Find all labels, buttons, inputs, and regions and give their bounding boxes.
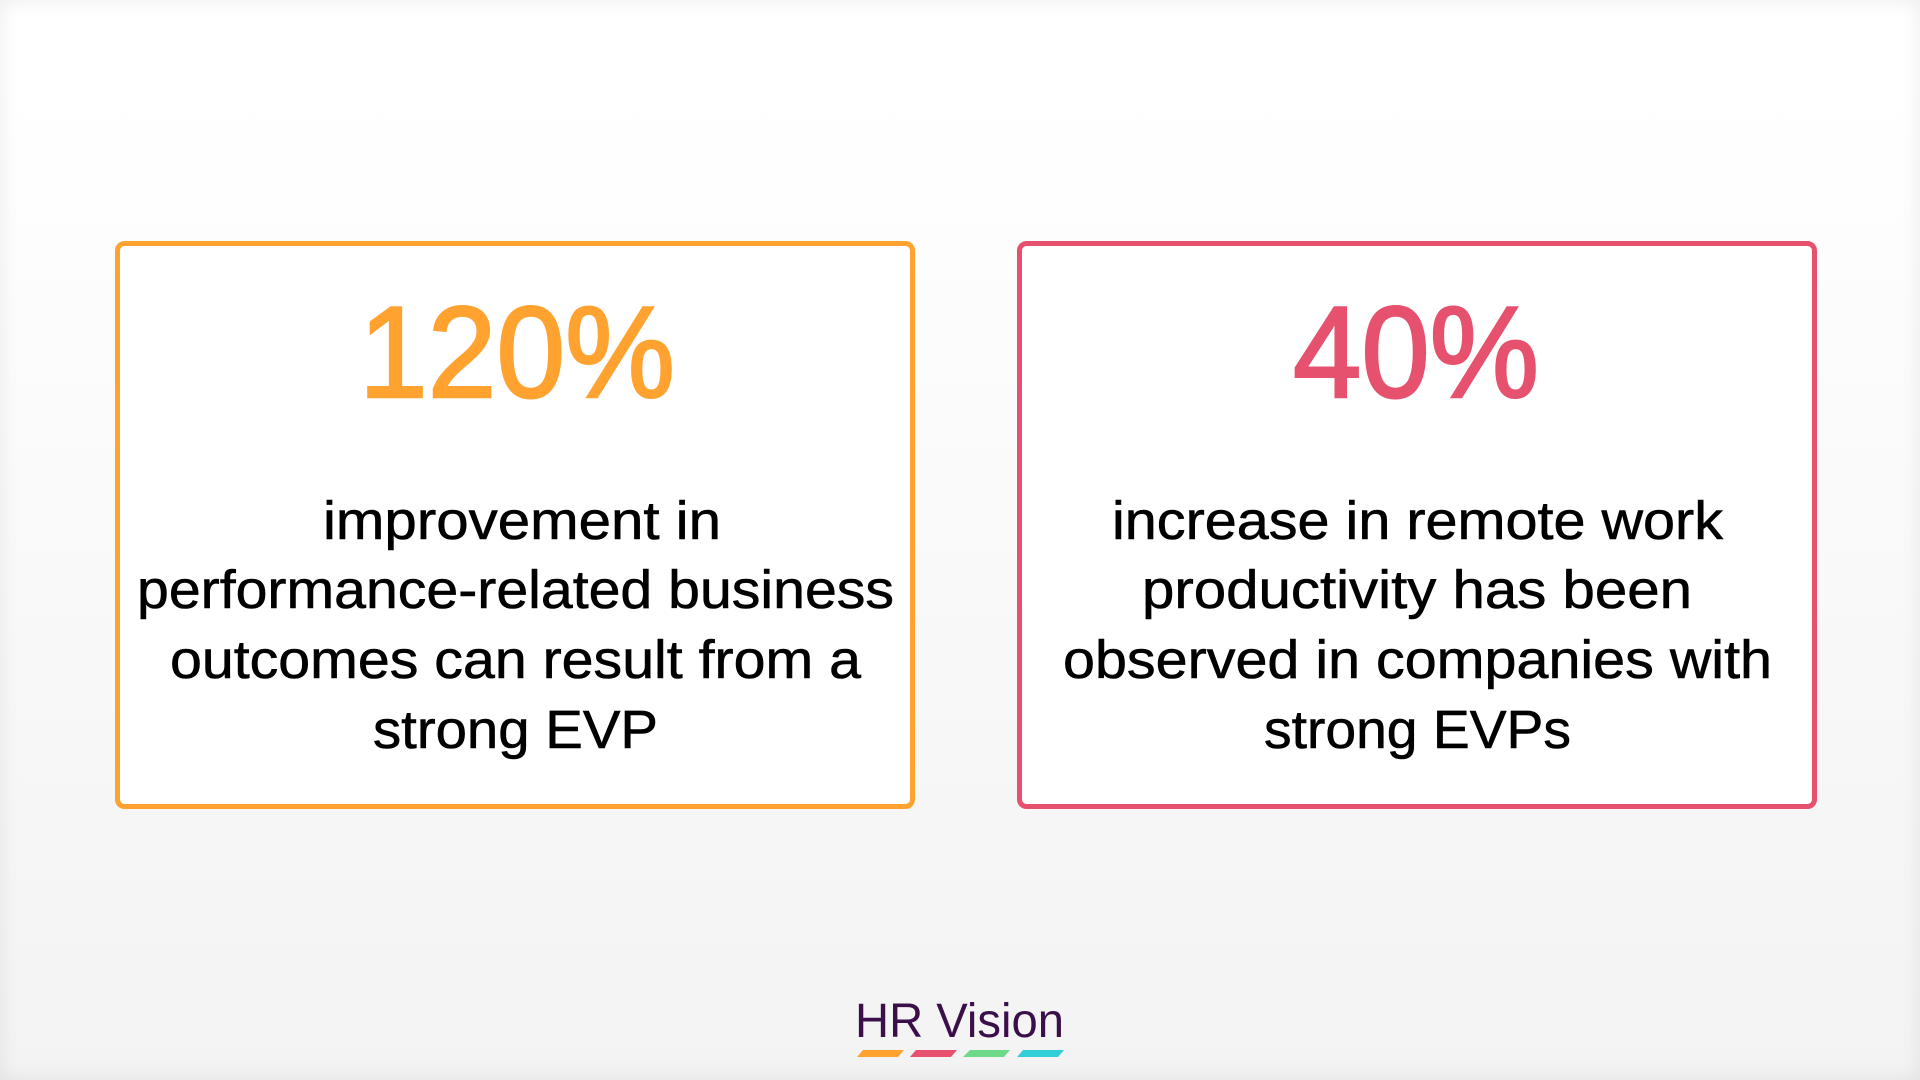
big number: 120%: 120% xyxy=(359,279,675,425)
panel: 40% statistic xyxy=(1020,244,1814,806)
card outline: red xyxy=(1020,244,1814,806)
description: remote work productivity xyxy=(1063,491,1772,760)
logo: HR Vision xyxy=(855,995,1064,1057)
logo stripes xyxy=(857,1050,1064,1057)
logo wordmark: HR Vision xyxy=(855,995,1064,1048)
description: improvement: performance-related business xyxy=(137,560,894,620)
big number: 40%: 40% xyxy=(1293,279,1539,425)
description: improvement: improvement in xyxy=(323,491,721,551)
description: remote work productivity: strong EVPs xyxy=(1264,700,1571,760)
description: improvement: strong EVP xyxy=(373,700,658,760)
card outline: orange xyxy=(118,244,912,806)
description: remote work productivity: increase in remote work xyxy=(1112,491,1724,551)
panel: 120% statistic xyxy=(118,244,912,806)
description: improvement xyxy=(137,491,894,760)
description: improvement: outcomes can result from a xyxy=(170,630,862,690)
description: remote work productivity: productivity has been xyxy=(1142,560,1692,620)
description: remote work productivity: observed in companies with xyxy=(1063,630,1772,690)
